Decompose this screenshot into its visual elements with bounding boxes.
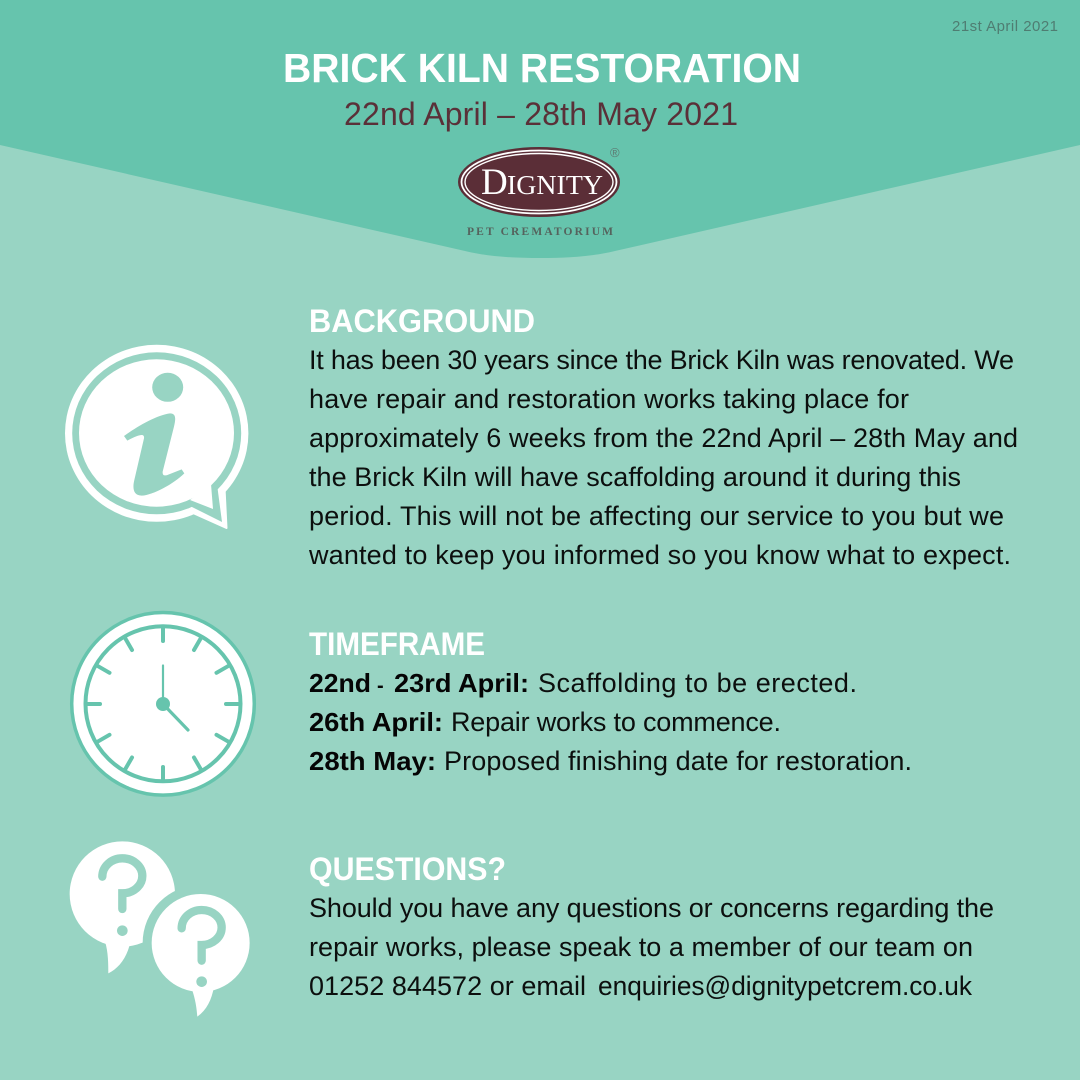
logo: Dignity Pet Crematorium — [458, 145, 620, 238]
timeline row: repair works — [309, 707, 781, 737]
background body text: approximately 6 weeks from the 22nd April – 28th May and — [309, 423, 1018, 453]
timeline row: scaffolding: - — [377, 675, 384, 697]
background body text: have repair and restoration works taking place for — [309, 384, 909, 414]
date range subtitle: 22nd April – 28th May 2021 — [344, 96, 738, 132]
timeline row: scaffolding: Scaffolding to be erected. — [538, 668, 857, 698]
panel: questions — [309, 851, 994, 1001]
timeline row: scaffolding: 23rd April: — [394, 668, 529, 698]
panel: timeframe — [309, 626, 912, 776]
logo: Dignity Pet Crematorium: PET CREMATORIUM — [467, 226, 613, 238]
questions body text: enquiries@dignitypetcrem.co.uk — [598, 971, 972, 1001]
icon: clock — [72, 612, 254, 795]
questions body text: Should you have any questions or concerns regarding the — [309, 893, 994, 923]
header band — [0, 0, 1080, 258]
timeline row: repair works: Repair works to commence. — [451, 707, 781, 737]
background body text: the Brick Kiln will have scaffolding around it during this — [309, 462, 961, 492]
icon: information speech bubble — [65, 345, 248, 528]
background body text: period. This will not be affecting our service to you but we — [309, 501, 1004, 531]
timeline row: repair works: 26th April: — [309, 707, 443, 737]
timeline row: scaffolding — [309, 668, 857, 698]
background body text: wanted to keep you informed so you know what to expect. — [308, 540, 1011, 570]
heading: questions: QUESTIONS? — [309, 851, 506, 887]
questions body text — [309, 893, 994, 1001]
icon: question speech bubbles — [70, 841, 259, 1017]
heading: timeframe: TIMEFRAME — [309, 626, 485, 662]
questions body text: 01252 844572 or email — [309, 971, 586, 1001]
timeline row: finishing date: 28th May: — [309, 746, 436, 776]
logo: Dignity Pet Crematorium: D — [481, 162, 508, 203]
heading: background: BACKGROUND — [309, 303, 535, 339]
background body text: It has been 30 years since the Brick Kiln was renovated. We — [309, 345, 1014, 375]
background body text — [308, 345, 1018, 570]
logo: Dignity Pet Crematorium: IGNITY — [507, 170, 603, 200]
timeline row: finishing date: Proposed finishing date for restoration. — [444, 746, 912, 776]
title: BRICK KILN RESTORATION — [283, 45, 801, 91]
logo: Dignity Pet Crematorium: ® — [610, 145, 620, 160]
timeline row: scaffolding: 22nd — [309, 668, 371, 698]
questions body text: repair works, please speak to a member of our team on — [309, 932, 973, 962]
issue date: 21st April 2021 — [952, 18, 1058, 35]
panel: background — [308, 303, 1018, 570]
